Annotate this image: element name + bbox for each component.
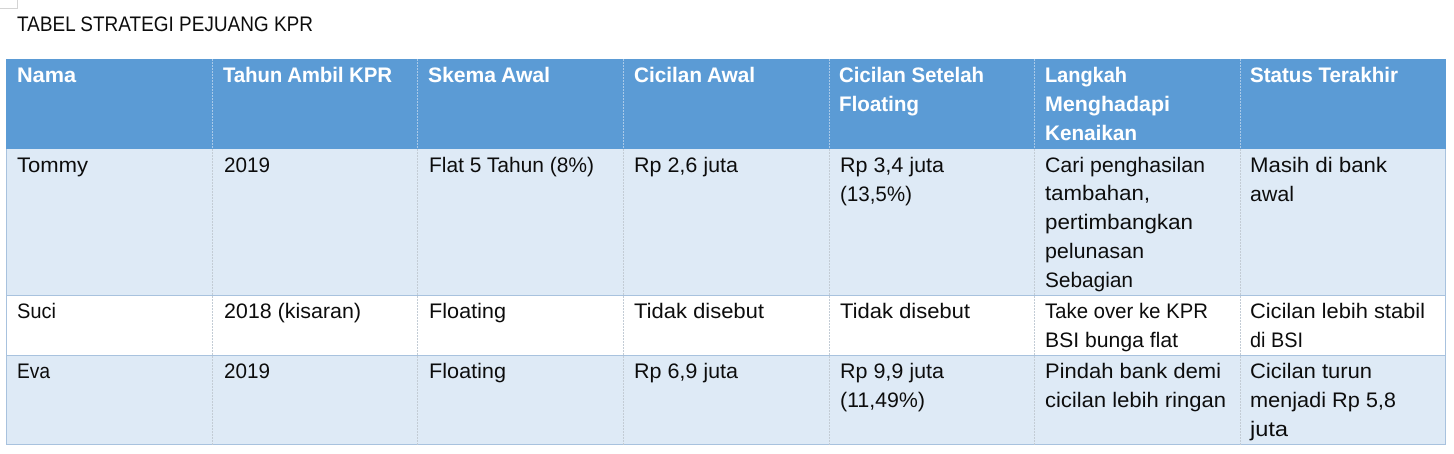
row: Tommy: Sebagian bbox=[1045, 269, 1133, 292]
row: Tommy: Tommy bbox=[17, 154, 89, 177]
row: Suci: Cicilan lebih stabil bbox=[1250, 300, 1425, 323]
row: Suci: Suci bbox=[17, 300, 56, 323]
row: Tommy: awal bbox=[1250, 183, 1294, 206]
header: Langkah Menghadapi Kenaikan: Kenaikan bbox=[1045, 122, 1137, 145]
header: Cicilan Setelah Floating: Cicilan Setelah bbox=[839, 64, 984, 87]
row: Suci: BSI bunga flat bbox=[1045, 329, 1178, 352]
header: Status Terakhir: Status Terakhir bbox=[1250, 64, 1398, 87]
row: Suci: Take over ke KPR bbox=[1045, 300, 1208, 323]
row: Eva bbox=[6, 355, 1446, 445]
header: Cicilan Setelah Floating: Floating bbox=[839, 93, 919, 116]
row: Eva: Rp 9,9 juta bbox=[840, 360, 944, 383]
row: Suci: Tidak disebut bbox=[840, 300, 970, 323]
row: Tommy: Cari penghasilan bbox=[1045, 154, 1205, 177]
row: Tommy bbox=[6, 149, 1446, 295]
row: Tommy: 2019 bbox=[224, 154, 270, 177]
row: Tommy: tambahan, bbox=[1045, 182, 1150, 205]
row: Suci: Tidak disebut bbox=[634, 300, 764, 323]
row: Eva: Pindah bank demi bbox=[1045, 360, 1221, 383]
row: Eva: Eva bbox=[17, 360, 50, 383]
header: Langkah Menghadapi Kenaikan bbox=[1045, 64, 1170, 145]
row: Suci: 2018 (kisaran) bbox=[224, 300, 361, 323]
row: Tommy: Rp 3,4 juta bbox=[840, 154, 944, 177]
row: Eva: Cicilan turun bbox=[1250, 360, 1372, 383]
row: Eva: (11,49%) bbox=[840, 389, 925, 412]
row: Eva: 2019 bbox=[224, 360, 270, 383]
row: Tommy: pertimbangkan bbox=[1045, 211, 1193, 234]
row: Eva: cicilan lebih ringan bbox=[1045, 389, 1226, 412]
row: Eva: menjadi Rp 5,8 bbox=[1250, 389, 1396, 412]
row: Tommy: Flat 5 Tahun (8%) bbox=[429, 154, 594, 177]
header: Langkah Menghadapi Kenaikan: Menghadapi bbox=[1045, 93, 1170, 116]
header row bbox=[6, 59, 1446, 149]
row: Eva: Rp 6,9 juta bbox=[634, 360, 738, 383]
row: Suci: Floating bbox=[429, 300, 506, 323]
header: Tahun Ambil KPR: Tahun Ambil KPR bbox=[223, 64, 392, 87]
row: Tommy: pelunasan bbox=[1045, 240, 1144, 263]
row: Suci: di BSI bbox=[1250, 329, 1303, 352]
row: Tommy: Rp 2,6 juta bbox=[634, 154, 738, 177]
row: Eva: juta bbox=[1249, 418, 1288, 441]
header: Cicilan Setelah Floating bbox=[839, 64, 984, 116]
header: Skema Awal: Skema Awal bbox=[428, 64, 550, 87]
header: Cicilan Awal: Cicilan Awal bbox=[634, 64, 755, 87]
header: Langkah Menghadapi Kenaikan: Langkah bbox=[1045, 64, 1127, 87]
header: Nama: Nama bbox=[17, 64, 76, 87]
row: Suci bbox=[6, 296, 1446, 355]
row: Tommy: (13,5%) bbox=[840, 183, 912, 206]
row: Eva: Floating bbox=[429, 360, 506, 383]
row: Tommy: Masih di bank bbox=[1250, 154, 1388, 177]
title: TABEL STRATEGI PEJUANG KPR bbox=[17, 13, 313, 36]
